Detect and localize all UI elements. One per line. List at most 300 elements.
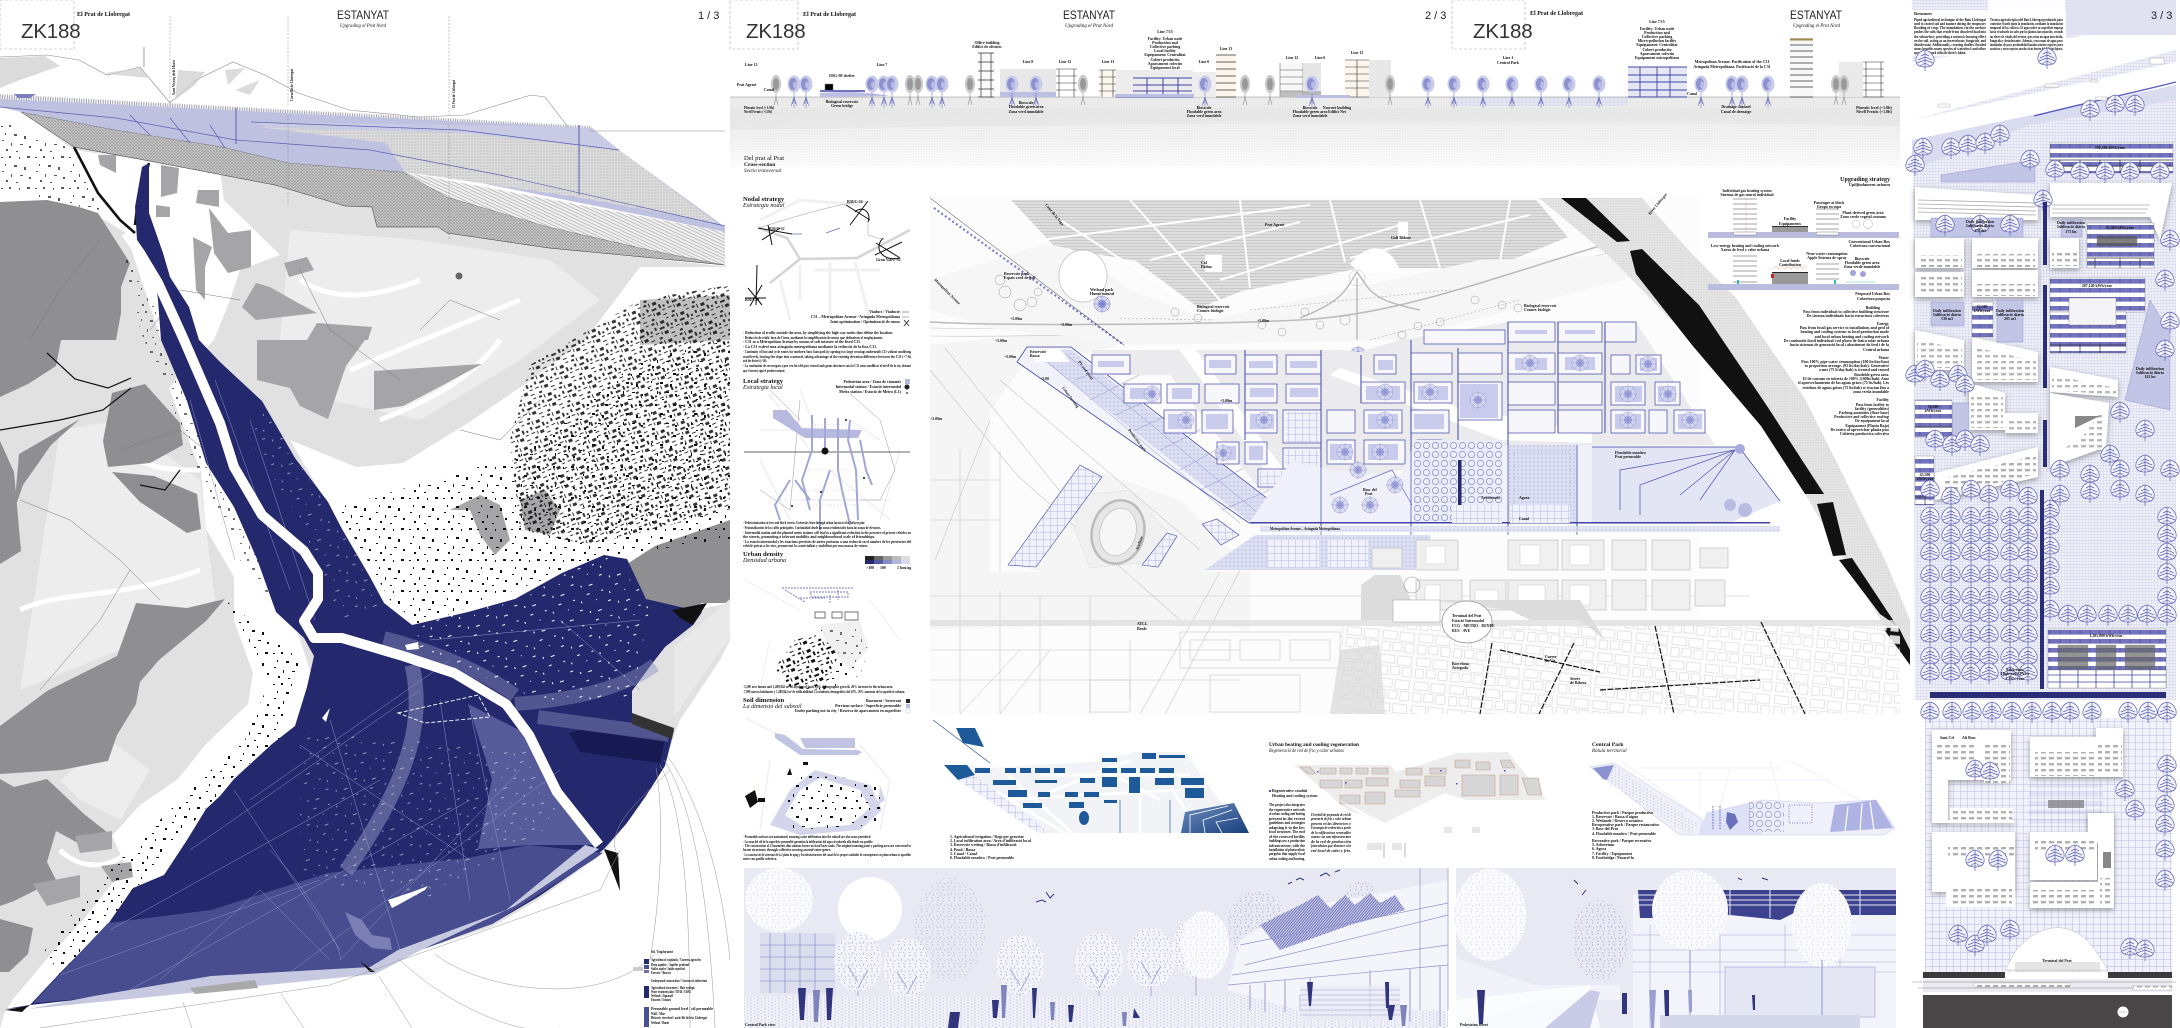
top roads and bands — [1912, 0, 2176, 170]
mini section: conventional urban fabric: Cobertura convencional — [1850, 244, 1891, 248]
diagram: central park: 7. Facility / Equipament — [1592, 852, 1633, 856]
diagram: central park: Rótula territorial — [1591, 749, 1627, 754]
plan: labels: de Via — [1545, 659, 1556, 663]
mini section: conventional urban fabric: Facility — [1784, 217, 1796, 221]
legend: nodal strategy — [811, 310, 909, 326]
pavilion building with saw-tooth roof — [1227, 868, 1448, 1026]
text block: resumen: un efecto de colada del terreno, que actúa un agua insecticida, — [1990, 35, 2063, 39]
mini section: proposed urban fabric — [1708, 244, 1899, 301]
plan: river band — [1539, 198, 1910, 665]
plan: labels: +5.00m — [1010, 317, 1023, 321]
section: annotations: Facility: Urban node — [1640, 27, 1675, 31]
legend of the territorial map: Shallow aquifer / Aqüífer superficial — [651, 967, 686, 971]
section: annotations: Line 7/15 — [1649, 20, 1665, 24]
legend: urban density: 100 — [880, 566, 886, 570]
plan: labels: Pàdua — [1201, 265, 1212, 269]
text: nodal strategy: - Reducció de tràfic fora de l'àrea, mediante la simplificación de nusos que defineixen el emplaçament. — [743, 336, 883, 340]
legend: nodal strategy: C31 – Metropolitan Avenue / Avinguda Metropolitana — [811, 315, 900, 319]
plan: labels: Canal — [1519, 517, 1530, 521]
text: urban density: -7,000 nuevos habitantes y 1,489,842 m² de edificabilidad. Crecimiento demográfico del 20%. 26% aumento de la superficie urbana. — [743, 690, 905, 694]
section: annotations: Bioswale — [1197, 106, 1212, 110]
text: upgrading strategy: Energy — [1877, 322, 1889, 326]
dashed section markers: El Prat de Llobregat — [452, 79, 456, 108]
diagram: nodal strategy: B30/C-32 — [769, 227, 785, 231]
roof yield labels: Infiltració diària — [1966, 224, 1994, 228]
terminal arc and rail: Terminal del Prat — [2042, 959, 2072, 963]
text block: resumen: disinfectant. Additionally, creating shallow flooded — [1914, 43, 1987, 47]
moon — [838, 877, 902, 941]
legend: nodal strategy: Viaduct / Viaducte — [869, 310, 900, 314]
section: annotations: Facility: Urban node — [1148, 37, 1183, 41]
heading: urban density: Urban density — [743, 551, 784, 558]
section: annotations: Aparcament colectiu — [1640, 52, 1675, 56]
section: annotations: Central Park — [1497, 61, 1520, 65]
section: annotations: Floodable green area — [1187, 110, 1221, 114]
plan: labels: FCG · METRO · RENFE — [1452, 624, 1495, 628]
section: annotations: Production and — [1644, 31, 1671, 35]
render: central park perspective — [744, 868, 1448, 1028]
plan: labels: Terminal del Prat — [1452, 614, 1482, 618]
diagram: urban heating and cooling regeneration: local structure. The roof — [1269, 830, 1306, 834]
header sheet 3 — [1452, 0, 1842, 49]
plan: agricultural parcels — [1011, 200, 1568, 310]
section: buildings — [820, 39, 1884, 98]
section: annotations: DSG-DI shelter — [829, 74, 855, 78]
mini section: conventional urban fabric: Grupo en sopa — [1817, 205, 1841, 209]
heading: soil dimension: La dimensió del subsoil — [742, 703, 802, 710]
plan: labels: Espais verd de golf — [1004, 276, 1036, 280]
legend of the territorial map: Water treatment plant / EDAR / EDAR — [651, 990, 691, 994]
facade window rows — [1917, 200, 2150, 495]
roof yield labels: Daily infiltration — [2057, 221, 2086, 225]
text: upgrading strategy: Cobierta productiva colectiva — [1840, 432, 1889, 436]
roof yield labels: Infiltració diària — [2136, 371, 2164, 375]
diagram: central park: 1. Reservoir / Bassa d'aigua — [1592, 815, 1638, 819]
text: nodal strategy: - La C31 esdevé una avinguda metropolitana mediante la reducció de la fixa C31. — [743, 345, 877, 349]
legend: soil dimension — [795, 699, 910, 713]
section: annotations: Avinguda Metropolitana. Pacificació de la C31 — [1693, 65, 1771, 69]
legend: pedestrian area and stations: Metro station / Estació de Metro (L1) — [839, 390, 902, 394]
diagram: urban heating and cooling regeneration: buildings use a production — [1269, 839, 1306, 843]
plan: labels: Avinguda — [1452, 666, 1468, 670]
section: annotations: Prat Agrari — [737, 83, 757, 87]
diagram: blue water and green network: 5. Canal / Canal — [950, 852, 978, 856]
section: annotations: Office building — [975, 41, 1000, 45]
diagram: local strategy — [744, 385, 910, 530]
section: annotations: Equipament local — [1150, 66, 1181, 70]
text: upgrading strategy: zona verda inundable — [1853, 390, 1889, 394]
plan: labels: Renfe — [1137, 627, 1147, 631]
panel: territorial map sheet 1 — [0, 0, 730, 1028]
diagram: urban heating and cooling regeneration: Regenerative conduit — [1272, 789, 1308, 793]
plan: labels: Reservoir — [1030, 350, 1046, 354]
mini section: conventional urban fabric: Plant-derived green area — [1842, 211, 1884, 215]
plan: labels: PV roof plant — [1077, 360, 1094, 381]
roof yield labels: Infiltració diària — [1996, 313, 2024, 317]
plan: labels: Agora — [1519, 496, 1529, 500]
header sheet 2: Upgrading el Prat Nord — [1065, 23, 1113, 29]
text: upgrading strategy: el aprovechamiento de las aguas grises (75 lts/hab). Les — [1798, 381, 1889, 385]
canal and people — [1456, 878, 1860, 1028]
trees in the park — [1906, 48, 2179, 684]
mini section: proposed urban fabric: Apple Sistema de xpray — [1807, 256, 1847, 260]
text: soil dimension: entre con pasillo colectivo. — [743, 857, 777, 861]
section: annotations: Zona verd inundable — [1009, 110, 1044, 114]
dashed section markers — [170, 16, 456, 240]
roof yield labels: 139 m3 — [1941, 317, 1953, 321]
plan: labels: Metropolitan Avenue — [933, 278, 961, 306]
text: nodal strategy: que el terreny sigui el pendent natural. — [743, 369, 785, 373]
text: upgrading strategy: Facility — [1876, 398, 1889, 402]
plan: labels: +5.00m — [995, 339, 1008, 343]
diagram: urban heating and cooling regeneration: The project also integrates — [1269, 803, 1305, 807]
mini section: proposed urban fabric: Low-energy heating and cooling network — [1711, 244, 1780, 248]
text: upgrading strategy — [1784, 177, 1891, 436]
text block: resumen: Técnica agrícola típica del Baix Llobregat producida para — [1990, 18, 2063, 22]
plan: labels: ATLL — [1137, 622, 1148, 626]
diagram: central park: Central Park — [1592, 742, 1624, 748]
panel: masterplan — [930, 192, 1910, 714]
text: upgrading strategy: Pass 100% pipe water consumption (100 lts/day/hou) — [1801, 360, 1890, 364]
facade on the left — [1456, 958, 1620, 1028]
section: annotations: Line 1 — [1503, 56, 1513, 60]
text: upgrading strategy: De sistema individuals hacia estructura colectivas — [1807, 314, 1889, 318]
plan: labels: Stadium — [1135, 535, 1144, 550]
legend: urban density: 1 hou/ag — [897, 566, 911, 570]
map: flood plain in navy — [5, 163, 702, 1009]
text: soil dimension: - Permeable surfaces are maintained, ensuring water infiltration into the subsoil are also areas permitted. — [743, 835, 871, 839]
heading: local strategy: Local strategy — [743, 378, 784, 385]
plan: labels: Bassa — [1030, 354, 1040, 358]
legend of the territorial map: Permeable ground level / sòl permeable — [651, 1007, 713, 1011]
diagram: urban heating and cooling regeneration: pergolas that supply local — [1269, 852, 1306, 856]
mini section: conventional urban fabric: Sistema de gas mural individual — [1720, 193, 1775, 197]
heading: urban density — [742, 551, 786, 564]
section: annotations: Equipament: Centralitat — [1636, 43, 1678, 47]
text: upgrading strategy: and local urban heating and cooling network — [1815, 335, 1890, 339]
roof yield labels: Daily infiltration — [1996, 309, 2025, 313]
section: annotations: Local facility — [1154, 49, 1176, 53]
text block: resumen: hacia el subsuelo las sales que las plantas han separado, creando — [1990, 30, 2063, 34]
people and birds — [798, 870, 1407, 1028]
roof yield labels: Infiltració diària — [1933, 313, 1961, 317]
text: urban density: -3,200 new homes and 1,489,842 m² of develop of land. 20% demographic growth. 26% increase in the urban area. — [743, 685, 893, 689]
section: annotations: Line 13 — [1102, 60, 1114, 64]
mini section: proposed urban fabric: Local funds — [1780, 259, 1800, 263]
legend of the territorial map: Wall / Mur — [651, 1012, 665, 1016]
section: cover above the map — [0, 0, 730, 267]
building on the right — [1633, 890, 1896, 1028]
plan: labels: +5.00m — [1257, 319, 1270, 323]
roof yield labels: 74,600 — [1928, 405, 1938, 409]
heading: soil dimension — [742, 697, 802, 710]
dashed section markers: Cornellà de Llobregat — [290, 68, 294, 101]
section: annotations: Nivell Freatic (+1.8ft) — [1856, 110, 1893, 114]
diagram: urban heating and cooling regeneration: de la red de producción — [1311, 840, 1351, 844]
ground and subsoil strip — [730, 97, 1900, 172]
diagram: urban heating and cooling regeneration: present in the recent — [1269, 817, 1306, 821]
text: upgrading strategy: floodable green area. — [1854, 373, 1889, 377]
plan: labels: Biological reservoir — [1197, 305, 1230, 309]
text: soil dimension: - La zona del sòl de la superfície permeable garantiza la infiltración del agua al subsuelo alla donde sea posible. — [743, 840, 873, 844]
plan: labels: Arboretum — [1481, 496, 1500, 500]
plan: lower neighbourhood blocks — [930, 526, 1910, 714]
plan: labels: River Llobregat — [1648, 192, 1668, 216]
plan: labels: Wetland park — [1090, 288, 1114, 292]
plan: labels: Biological reservoir — [1524, 304, 1557, 308]
text: upgrading strategy: Central urbana — [1863, 348, 1889, 352]
plan: labels: +5.00m — [930, 417, 943, 421]
panel: urban cross-section sheets 2 and 3 — [730, 0, 1900, 174]
plan: labels: Productive park — [1127, 428, 1147, 453]
plan: central park — [1249, 440, 1780, 535]
legend of the territorial map: Sòl / Employment — [651, 950, 674, 954]
roof yield labels: Arboretum — [2006, 668, 2025, 672]
plan: labels: Bosc del — [1363, 488, 1378, 492]
legend of the territorial map: Historic riverbed / antic llit del riu Llobregat — [651, 1016, 708, 1020]
text block: resumen: controlar el suelo junto la inundación, mediante la inundación — [1990, 22, 2064, 26]
roof yield labels: 33,300 — [1977, 305, 1987, 309]
header sheet 1: ESTANYAT — [337, 10, 389, 22]
legend: soil dimension: Under parking use in city / Reserva de aparcament en superfície — [795, 709, 901, 713]
heading: soil dimension: Soil dimension — [743, 697, 785, 704]
plan: labels: Prat Agrari — [1265, 223, 1285, 227]
section: annotations: Canal — [764, 88, 775, 92]
text: upgrading strategy: El de consum en tuberia de 100% (100lts/hab). Amo — [1803, 377, 1889, 381]
diagram: urban heating and cooling regeneration: infrastructure, with the — [1269, 844, 1305, 848]
text: local strategy: vehicle privat a les vies, promovent la convivialitat y mobilitat per una massa de veïnes. — [743, 544, 868, 548]
text: upgrading strategy: De combustió fossil individual i sol photo de fàtica solar urbana — [1784, 339, 1889, 343]
text: upgrading strategy: heating and cooling systems to local production mode — [1801, 330, 1889, 334]
map: terrain base — [0, 107, 730, 1028]
section: annotations: Edifici de oficines — [972, 45, 1002, 49]
diagram: urban heating and cooling regeneration: red local de calor y frio. — [1311, 849, 1351, 853]
text: upgrading strategy: Pass from facility to — [1856, 403, 1889, 407]
mini section: conventional urban fabric: Zona verde vegetal comuna — [1840, 215, 1886, 219]
section: annotations: Micro-pollution facility — [1638, 39, 1676, 43]
caption: Central Park view — [745, 1023, 776, 1027]
map: sea and coast — [0, 599, 730, 1028]
diagram: urban heating and cooling regeneration — [1268, 742, 1546, 861]
heading: local strategy: Estrategia local — [742, 384, 783, 391]
roof yield labels: Daily infiltration — [1933, 309, 1962, 313]
diagram: urban heating and cooling regeneration: the regenerative network — [1269, 808, 1306, 812]
text block: resumen: used to control soil and manure during the temporary — [1914, 22, 1986, 26]
roof yield labels: 173 lm — [2065, 230, 2077, 234]
header sheet 1: 1 / 3 — [698, 10, 719, 22]
header sheet 3: El Prat de Llobregat — [1530, 10, 1584, 17]
plan: labels: Reservoir park — [1004, 272, 1030, 276]
section: annotations: Aparcament colectiu — [1148, 62, 1183, 66]
text: local strategy: - Pedestrianisation of tree and block streets. University lines through urban layout to the Airbyte pair. — [743, 521, 865, 525]
section: annotations: Zona verd inundable — [1187, 114, 1222, 118]
section: annotations: Nivell Freatic (+1.8ft) — [744, 110, 773, 114]
plan: labels: Carrer — [1545, 655, 1557, 659]
diagram: urban heating and cooling regeneration: guidelines and strategies — [1269, 821, 1305, 825]
plan: labels: Barcelona — [1452, 662, 1469, 666]
header sheet 3: ESTANYAT — [1790, 10, 1842, 22]
diagram: central park: Recuperative park / Parque restaurativo — [1592, 823, 1659, 827]
heading: cross-section — [744, 155, 784, 174]
diagram: urban density — [745, 580, 900, 690]
roof yield labels: 143 lm — [2144, 375, 2156, 379]
text: nodal strategy: and the district (+3ft). — [743, 359, 767, 363]
diagram: soil dimension — [745, 718, 890, 835]
text block: resumen: inundadas de poco profundidad bandas muchas especies para — [1990, 43, 2063, 47]
heading: cross-section: Cross-section — [744, 162, 775, 168]
plan: labels: Prat permeable — [1615, 455, 1641, 459]
mountain profile — [0, 47, 725, 131]
header sheet 2: 2 / 3 — [1425, 10, 1446, 22]
diagram: nodal strategy — [745, 200, 910, 320]
diagram: urban heating and cooling regeneration: Estrategia de redención a partir — [1310, 826, 1351, 830]
mini section: conventional urban fabric: Passenger at block — [1814, 201, 1845, 205]
text block: resumen: areas benefits many species of waterfowl and other — [1914, 47, 1986, 51]
mini section: proposed urban fabric: Contribution — [1779, 263, 1802, 267]
diagram: blue water and green network: 1. Agricultural irrigation / Regs per gravetat — [950, 835, 1024, 839]
legend of the territorial map: Agricultural croplands / Conreus agrícoles — [651, 958, 701, 962]
plan: labels: Golf Bidone — [1391, 236, 1411, 240]
section: annotations: Line 12 — [745, 63, 757, 67]
mini section: proposed urban fabric: Bioswale — [1855, 257, 1870, 261]
roof yield labels: High-yield PVCs — [2001, 672, 2029, 676]
section: annotations: Canal — [1687, 92, 1698, 96]
lavender courtyards — [1931, 160, 2170, 437]
panel: upgrading strategy — [1708, 177, 1899, 436]
section: annotations: Equipament: Centralitat — [1144, 53, 1186, 57]
heading: nodal strategy: Estrategia nodal — [742, 202, 785, 209]
legend of the territorial map: Wetlands / Aiguamoll — [651, 994, 674, 998]
plan: labels: +5.00m — [1220, 399, 1233, 403]
text block: resumen: on the soil, acting as an invertebrate, fungicide, and — [1914, 39, 1987, 43]
section: annotations: Non-net building — [1323, 106, 1351, 110]
text block: resumen: the subsurface, providing a natural cleansing effect — [1914, 35, 1987, 39]
plan: labels: Prat — [1365, 492, 1373, 496]
plan: labels: Humit natural — [1090, 292, 1115, 296]
section: annotations: Phreatic level (+1.8ft) — [1856, 106, 1893, 110]
diagram: nodal strategy: Gran Via/C-32 — [876, 258, 901, 262]
mini section: proposed urban fabric: Zona verde inundable — [1844, 265, 1881, 269]
heading: cross-section: Sectio transversal — [744, 168, 782, 174]
diagram: central park: Recreative park / Parque recreativo — [1592, 839, 1651, 843]
text: upgrading strategy: hacia sistemas de generació local i abastiment de fred i de la — [1790, 343, 1889, 347]
roof yield labels: kWh/year — [1974, 309, 1991, 313]
trees in the perspective — [745, 868, 1384, 1026]
diagram: urban heating and cooling regeneration: installation of photovoltaic — [1269, 848, 1305, 852]
text: upgrading strategy: residuos de aguas grises (75 lts/hab) se tractan fins a — [1802, 386, 1889, 390]
plan: labels: Connex biològic — [1197, 309, 1224, 313]
header sheet 3: Upgrading el Prat Nord — [1793, 23, 1840, 29]
plan: green reserve with trees — [930, 198, 1640, 364]
plan: labels: +5.00 — [1040, 377, 1049, 381]
text: local strategy: the streets, promoting a tolerant mobility and neighbourhood scale of friendships. — [743, 535, 875, 539]
diagram: central park — [1590, 742, 1895, 860]
text: soil dimension: locate structures through collective moving around entre-genre. — [743, 848, 831, 852]
mini section: conventional urban fabric: Individual gas heating system — [1722, 189, 1772, 193]
roof yield labels: 378 m3 — [1974, 229, 1986, 233]
legend: urban density — [865, 556, 911, 570]
diagram: nodal strategy: B30/C-32 — [847, 200, 863, 204]
text: upgrading strategy: De teatro al aprovechar planta piso — [1831, 428, 1889, 432]
text: nodal strategy: - C31 as a Metropolitan Avenue by means of soft mixture of the fixed C31. — [743, 340, 861, 344]
diagram: urban heating and cooling regeneration: of urban cooling and heating — [1269, 812, 1305, 816]
mini section: proposed urban fabric: Proposed Urban Box — [1855, 292, 1890, 296]
header sheet 3: ZK188 — [1473, 20, 1532, 43]
diagram: urban heating and cooling regeneration: de lo edificacions renovables — [1311, 831, 1351, 835]
section: annotations: Zona verd inundable — [1293, 114, 1328, 118]
plan: labels: Connex biològic — [1524, 308, 1551, 312]
text block: resumen — [1912, 10, 2066, 56]
text: nodal strategy: - Continuity of foot and cycle routes for northern Sant Joan park by opening two large crossings underneath C31 without modifying — [743, 350, 911, 354]
plan: labels: Cal — [1201, 261, 1208, 265]
legend: pedestrian area and stations: Intermodal station / Estació intermodal — [836, 385, 902, 389]
sheet number: 3 / 3 — [2151, 10, 2172, 22]
heading: urban density: Densidad urbana — [742, 557, 786, 564]
text: local strategy — [743, 521, 912, 548]
legend of the territorial map — [633, 950, 713, 1027]
text: urban density — [743, 685, 905, 694]
legend of the territorial map: Forests / Boscos — [651, 971, 671, 975]
dashed section markers: Sant Vicenç dels Horts — [172, 60, 176, 95]
section: annotations: Line 8 — [1023, 60, 1033, 64]
plan: linear park parcels — [1017, 347, 1299, 523]
section: annotations: Drainage channel — [1721, 105, 1752, 109]
text block: resumen: species living around within the district's habitat. — [1914, 51, 1966, 55]
roof yield labels: 45,500 — [1920, 473, 1930, 477]
section: annotations: Line 7 — [877, 63, 887, 67]
diagram: urban heating and cooling regeneration: present en las directrices y — [1310, 822, 1351, 826]
text block: resumen: Piped agricultural technique of the Baix Llobregat — [1914, 18, 1987, 22]
diagram: urban heating and cooling regeneration: Urban heating and cooling regeneration — [1269, 742, 1360, 748]
striped solar roofs — [1915, 143, 2173, 827]
section: annotations: Line 12 — [1286, 56, 1298, 60]
legend of the territorial map: Underground constructions / Construcció subterrània — [651, 979, 707, 983]
dark footer with logo — [1923, 995, 2172, 1028]
section: annotations: Phreatic level (+1.8ft) — [744, 106, 775, 110]
legend: soil dimension: Pervious surface / Superfície permeable — [835, 704, 901, 708]
ground plane — [744, 996, 1448, 1028]
legend of the territorial map: Estuaries / Estuaris — [651, 998, 671, 1002]
mini section: conventional urban fabric: Conventional Urban Box — [1848, 240, 1890, 244]
trees in the street — [1454, 869, 1852, 1028]
heading: local strategy — [742, 378, 784, 391]
diagram: nodal strategy: B30/C58 — [745, 298, 759, 302]
text: upgrading strategy: waste (75 lt/day/hab) is treated and reused — [1819, 368, 1890, 372]
heading: cross-section: Del prat al Prat — [744, 155, 784, 162]
plan: labels: +5.00m — [1060, 323, 1073, 327]
legend: urban density: >100 — [866, 566, 874, 570]
plan: labels: Estació Intermodal — [1452, 619, 1485, 623]
diagram: central park: 3. Bosc del Prat — [1592, 827, 1619, 831]
building in the background — [760, 933, 835, 993]
plan: labels: Floodable meadow — [1615, 451, 1646, 455]
white buildings with shadow — [1915, 183, 2172, 500]
header sheet 1 — [0, 0, 719, 49]
legend: nodal strategy: Joint optimization / Optimització de nusos — [830, 320, 900, 324]
plan: labels: Street — [1570, 677, 1581, 681]
plan: labels: Camí de la Vega — [1044, 203, 1065, 226]
text block: resumen: flooding of crop. The inundation via the surface — [1914, 26, 1986, 30]
section: annotations: Line 6 — [1315, 56, 1325, 60]
plan: labels: BUS · AVE — [1452, 629, 1471, 633]
mini section: proposed urban fabric: Xarxa de fred y calor urbana — [1721, 248, 1769, 252]
legend: pedestrian area and stations — [836, 379, 910, 394]
axonometric: lower block neighbourhood: Sant Cel — [1940, 736, 1955, 740]
diagram: urban heating and cooling regeneration: Heating and cooling system — [1272, 794, 1318, 798]
text: upgrading strategy: Building — [1866, 306, 1880, 310]
section: annotations: Collective parking — [1150, 45, 1180, 49]
mini section: conventional urban fabric — [1708, 189, 1899, 248]
